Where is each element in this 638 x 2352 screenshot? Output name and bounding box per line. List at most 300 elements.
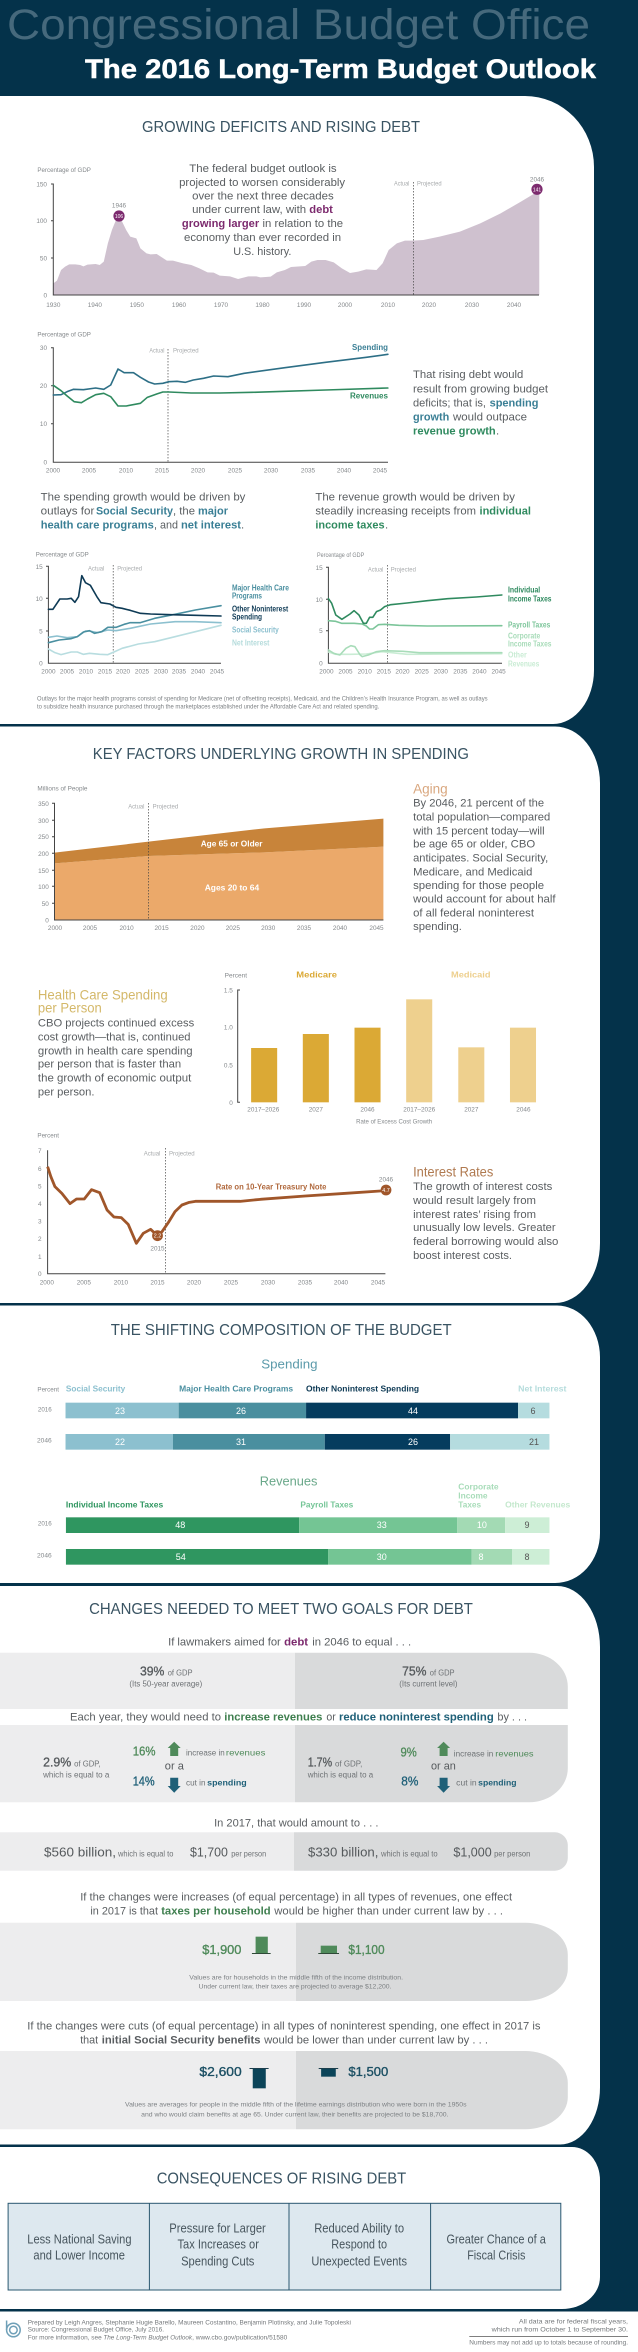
consequences table (8, 2203, 561, 2290)
chart: revenue composition: Revenues (260, 1473, 318, 1488)
chart: spending by category: 15 (36, 564, 43, 571)
chart: population by age: Millions of People (37, 786, 88, 793)
chart: spending by category: 2015 (98, 668, 113, 676)
text: interest rates: Interest Rates (413, 1164, 493, 1180)
comparison: social security benefits: and who would claim benefits at age 65. Under current law, their benefits are projected to be $18,700. (141, 2112, 449, 2119)
chart: revenues by category: 2040 (472, 668, 487, 676)
chart: revenue composition: 2016 (38, 1521, 52, 1528)
chart: spending composition: 26 (236, 1406, 246, 1416)
chart: debt as percentage of GDP: 0 (43, 292, 47, 300)
text: rising debt explanation: deficits; that is, (413, 397, 486, 409)
text: spending growth drivers: major (198, 506, 229, 518)
text: debt goal prompt: If lawmakers aimed for (168, 1637, 281, 1649)
notes: Numbers may not add up to totals because of rounding. (469, 2340, 628, 2347)
text: interest rates: unusually low levels. Greater (413, 1222, 556, 1234)
panel: changes needed to meet two goals for debt (0, 1586, 600, 2144)
chart: debt as percentage of GDP: 2040 (507, 302, 522, 309)
chart: spending composition: Major Health Care Programs (179, 1384, 293, 1394)
chart: spending by category: 2045 (210, 668, 225, 676)
chart: spending by category: 0 (39, 660, 43, 668)
chart: spending and revenues: 0 (43, 460, 47, 466)
heading: KEY FACTORS UNDERLYING GROWTH IN SPENDING (93, 746, 469, 763)
chart: spending composition: 23 (115, 1406, 125, 1416)
chart: revenues by category: 2045 (491, 668, 506, 676)
text: debt goal prompt (168, 1637, 411, 1649)
text: aging: Aging (413, 781, 448, 797)
chart: 10-year treasury rate: 7 (38, 1148, 42, 1155)
chart: spending and revenues: Projected (173, 348, 199, 355)
comparison: social security benefits: $2,600 (199, 2064, 242, 2079)
chart: revenues by category: Individual (508, 585, 540, 595)
chart: debt as percentage of GDP: 1980 (255, 302, 270, 309)
text: annual change prompt: or (326, 1712, 336, 1724)
chart: revenue composition: Taxes (458, 1499, 481, 1509)
chart: spending and revenues: 10 (40, 421, 47, 428)
chart: spending composition: 31 (236, 1437, 246, 1447)
comparison: taxes per household: $1,900 (202, 1942, 241, 1957)
chart: revenue composition: 30 (377, 1552, 387, 1562)
consequence: tax and spending pressure: Pressure for Larger (169, 2221, 266, 2236)
comparison: debt goals: (Its 50-year average) (129, 1680, 203, 1689)
left goal changes: revenues (226, 1749, 265, 1758)
chart: spending composition: 21 (529, 1437, 539, 1447)
chart: debt as percentage of GDP: 2046 (530, 176, 545, 184)
panel: growing deficits and rising debt (0, 96, 594, 724)
chart: excess cost growth bars: 0.5 (224, 1062, 233, 1070)
footnote: Outlays for the major health programs consist of spending for Medicare (net of offsetting receipts), Medicaid, and the Children’s Health Insurance Program, as well as outlays (37, 696, 488, 703)
text: budget outlook intro: U.S. history. (233, 246, 291, 258)
text: social security benefits prompt: that (80, 2035, 99, 2047)
text: health care spending per person: per Person (38, 1000, 102, 1016)
text: annual change prompt (70, 1712, 527, 1724)
chart: debt as percentage of GDP: 1946 (112, 202, 127, 210)
chart: excess cost growth bars: 2046 (516, 1107, 531, 1114)
text: health care spending per person (38, 986, 194, 1099)
text: annual change prompt: Each year, they would need to (70, 1712, 221, 1724)
text: aging: spending for those people (413, 880, 544, 892)
icon: tax bar 1100 (318, 1946, 339, 1954)
chart: debt as percentage of GDP: 141 (533, 187, 541, 193)
text: spending growth drivers: Social Security (96, 506, 174, 518)
chart: 10-year treasury rate: 2025 (224, 1279, 239, 1286)
chart: population by age: Actual (128, 804, 144, 811)
text: health care spending per person: growth in health care spending (38, 1046, 193, 1058)
chart: revenues by category: Corporate (508, 631, 540, 641)
text: 2017 prompt: In 2017, that would amount to . . . (214, 1818, 378, 1830)
chart: spending by category: Other Noninterest (232, 604, 288, 614)
chart: population by age: 150 (38, 868, 49, 875)
chart: population by age: 2020 (190, 925, 205, 932)
comparison: social security benefits: $1,500 (348, 2064, 388, 2079)
text: spending growth drivers: net interest (181, 520, 241, 532)
chart: population by age: 2005 (83, 925, 98, 932)
text: health care spending per person: Health Care Spending (38, 986, 168, 1002)
text: aging: with 15 percent today—will (412, 826, 545, 838)
chart: population by age: 50 (42, 901, 49, 908)
comparison: 2017 amounts: which is equal to (117, 1850, 174, 1859)
chart: debt as percentage of GDP: 1960 (172, 302, 187, 309)
chart: 10-year treasury rate: 2 (38, 1236, 42, 1243)
chart: revenue composition: 9 (524, 1520, 530, 1530)
heading: CHANGES NEEDED TO MEET TWO GOALS FOR DEBT (89, 1601, 473, 1618)
comparison: taxes per household (0, 1923, 568, 2001)
chart: 10-year treasury rate: 2.2 (154, 1234, 161, 1240)
right goal changes: 1.7% (308, 1756, 332, 1770)
comparison: 2017 amounts (0, 1832, 568, 1871)
chart: spending and revenues: 2005 (82, 468, 97, 474)
text: health care spending per person: the growth of economic output (38, 1073, 192, 1085)
notes: All data are for federal fiscal years, (519, 2318, 628, 2325)
text: rising debt explanation: . (496, 425, 499, 437)
chart: excess cost growth bars: 1.5 (224, 988, 233, 994)
chart: spending composition: Spending (261, 1356, 318, 1371)
text: interest rates (412, 1164, 558, 1262)
comparison: debt goals: of GDP (168, 1669, 192, 1678)
chart: population by age: Ages 20 to 64 (205, 883, 259, 893)
text: rising debt explanation: growth (413, 411, 449, 423)
left goal changes: 14% (133, 1775, 155, 1789)
title: The 2016 Long-Term Budget Outlook (85, 54, 597, 84)
chart: revenue composition (37, 1473, 570, 1565)
chart: excess cost growth bars: 2046 (360, 1107, 375, 1114)
text: spending growth drivers: outlays for (41, 506, 95, 518)
chart: spending composition: 2046 (37, 1437, 52, 1444)
credits (28, 2320, 351, 2342)
chart: population by age: 250 (38, 834, 49, 841)
chart: 10-year treasury rate: 2015 (150, 1246, 165, 1252)
text: rising debt explanation: spending (490, 397, 539, 409)
chart: revenue composition: 2046 (37, 1553, 52, 1560)
chart: population by age: 100 (38, 884, 49, 891)
consequence: saving and income (27, 2232, 131, 2263)
chart: spending composition: 22 (115, 1437, 125, 1447)
chart: debt as percentage of GDP (36, 167, 545, 309)
chart: debt as percentage of GDP: 1970 (214, 302, 229, 309)
consequence: tax and spending pressure: Spending Cuts (181, 2254, 255, 2269)
chart: revenues by category: 2020 (395, 668, 410, 676)
icon: benefit bar 1500 (319, 2068, 338, 2077)
chart: population by age: 2015 (154, 925, 169, 932)
chart: population by age: 200 (38, 851, 49, 858)
panel: key factors underlying growth in spending (0, 726, 600, 1303)
left goal changes: spending (207, 1779, 247, 1788)
chart: excess cost growth bars: 0 (229, 1100, 233, 1107)
heading: GROWING DEFICITS AND RISING DEBT (142, 119, 420, 136)
footnote (37, 696, 488, 711)
text: debt goal prompt: in 2046 to equal . . . (312, 1637, 411, 1649)
comparison: social security benefits: Values are averages for people in the middle fifth of the lifetime earnings distribution who were born in the 1950s (125, 2102, 466, 2109)
text: budget outlook intro: under current law, with (192, 204, 306, 216)
chart: spending by category: Percentage of GDP (36, 552, 89, 559)
right goal changes: or an (431, 1760, 456, 1772)
left goal changes: which is equal to a (42, 1770, 110, 1779)
chart: debt as percentage of GDP: 1930 (46, 302, 61, 309)
chart: spending and revenues: 2000 (46, 468, 61, 474)
chart: population by age: Projected (153, 804, 179, 811)
chart: revenues by category (316, 552, 552, 676)
chart: 10-year treasury rate: 4 (38, 1201, 42, 1208)
text: budget outlook intro: in relation to the (262, 218, 343, 230)
chart: population by age: 2040 (333, 925, 348, 932)
text: taxes per household prompt: taxes per household (161, 1906, 271, 1918)
chart: spending by category: 10 (36, 596, 43, 603)
chart: spending composition: 6 (530, 1406, 536, 1416)
text: health care spending per person: CBO projects continued excess (38, 1018, 194, 1030)
chart: population by age: 2010 (119, 925, 134, 932)
chart: 10-year treasury rate: 0 (38, 1271, 42, 1278)
chart: spending by category: Net Interest (232, 638, 270, 648)
chart: revenues by category: 0 (319, 660, 323, 668)
text: health care spending per person: per person that is faster than (38, 1059, 181, 1071)
comparison: taxes per household: Under current law, their taxes are projected to average $12,200. (199, 1984, 392, 1991)
chart: spending and revenues: 2030 (264, 468, 279, 474)
credits: For more information, see (28, 2335, 102, 2342)
chart: 10-year treasury rate: 2015 (150, 1279, 165, 1286)
chart: spending by category: 2030 (154, 668, 169, 676)
chart: population by age: Age 65 or Older (201, 839, 263, 849)
chart: revenue composition: Individual Income Taxes (66, 1499, 163, 1509)
chart: debt as percentage of GDP: 1950 (130, 302, 144, 309)
consequence: reduced ability to respond: Respond to (331, 2237, 387, 2252)
text: taxes per household prompt: in 2017 is that (90, 1906, 159, 1918)
chart: debt as percentage of GDP: 2030 (465, 302, 480, 309)
comparison: debt goals: 39% (140, 1665, 164, 1679)
comparison: 2017 amounts: per person (494, 1850, 530, 1859)
chart: revenue composition: 8 (478, 1552, 484, 1562)
chart: revenue composition: Income (458, 1490, 488, 1500)
text: budget outlook intro: over the next three decades (192, 190, 334, 202)
text: revenue growth drivers: individual (480, 506, 531, 518)
text: taxes per household prompt: If the changes were increases (of equal percentage) in all types of revenues, one effect (80, 1892, 513, 1904)
text: annual change prompt: reduce noninterest spending (339, 1712, 494, 1724)
text: rising debt explanation: result from growing budget (413, 383, 549, 395)
credits: , www.cbo.gov/publication/51580 (192, 2335, 288, 2342)
chart: spending composition: 26 (408, 1437, 418, 1447)
chart: revenues by category: Payroll Taxes (508, 620, 550, 630)
comparison: debt goals: (Its current level) (399, 1680, 458, 1689)
credits: Prepared by Leigh Angres, Stephanie Hugie Barello, Maureen Costantino, Benjamin Plotinsky, and Julie Topoleski (28, 2320, 351, 2327)
heading: CONSEQUENCES OF RISING DEBT (157, 2170, 406, 2187)
chart: excess cost growth bars: Percent (225, 972, 247, 979)
chart: revenues by category: 2000 (319, 668, 334, 676)
chart: debt as percentage of GDP: Percentage of GDP (37, 167, 91, 174)
chart: 10-year treasury rate: 1 (38, 1254, 42, 1261)
chart: 10-year treasury rate: 4.7 (382, 1188, 390, 1194)
comparison: debt goals: 75% (402, 1665, 426, 1679)
left goal changes: increase in (186, 1749, 225, 1758)
chart: population by age: 0 (45, 918, 49, 924)
chart: revenue composition: 48 (175, 1520, 185, 1530)
text: spending growth drivers: health care programs (41, 520, 154, 532)
chart: spending by category: 2020 (116, 668, 131, 676)
text: revenue growth drivers: The revenue growth would be driven by (315, 492, 515, 504)
chart: revenue composition: 10 (477, 1520, 487, 1530)
panel: the shifting composition of the budget (0, 1306, 600, 1583)
right goal changes: of GDP, (335, 1760, 362, 1769)
text: aging: Medicare, and Medicaid (413, 867, 532, 879)
comparison: 2017 amounts: per person (231, 1850, 266, 1859)
chart: revenue composition: 8 (524, 1552, 530, 1562)
consequence: fiscal crisis: Fiscal Crisis (467, 2248, 526, 2263)
chart: population by age: 2000 (48, 925, 63, 932)
chart: revenues by category: Income Taxes (508, 594, 552, 604)
text: aging: would account for about half (412, 894, 556, 906)
chart: 10-year treasury rate: Percent (37, 1133, 59, 1140)
chart: debt as percentage of GDP: 106 (115, 214, 123, 220)
right goal changes: 8% (401, 1775, 418, 1789)
chart: revenues by category: 2005 (338, 668, 353, 676)
comparison: taxes per household: Values are for households in the middle fifth of the income distribution. (189, 1974, 403, 1981)
chart: spending composition: Other Noninterest Spending (306, 1384, 419, 1394)
text: budget outlook intro: debt (309, 204, 333, 216)
chart: revenues by category: Percentage of GDP (317, 552, 364, 559)
text: budget outlook intro: economy than ever recorded in (184, 232, 341, 244)
left goal changes (42, 1742, 265, 1793)
chart: spending and revenues: 2040 (337, 468, 352, 474)
heading: THE SHIFTING COMPOSITION OF THE BUDGET (111, 1322, 452, 1339)
right goal changes: revenues (495, 1750, 534, 1759)
chart: spending and revenues: 20 (40, 383, 47, 390)
chart: spending composition: Percent (37, 1386, 59, 1393)
chart: revenues by category: Income Taxes (508, 639, 552, 649)
chart: revenues by category: Revenues (508, 659, 539, 669)
text: rising debt explanation: That rising debt would (413, 369, 523, 381)
chart: 10-year treasury rate: Actual (144, 1151, 160, 1158)
chart: 10-year treasury rate: 3 (38, 1218, 42, 1226)
chart: population by age: 350 (38, 801, 49, 808)
right goal changes: 9% (400, 1746, 417, 1760)
text: interest rates: federal borrowing would also (413, 1236, 558, 1248)
chart: spending by category: Spending (232, 611, 262, 621)
text: revenue growth drivers (315, 492, 531, 532)
text: budget outlook intro (179, 163, 345, 258)
chart: spending by category: 2000 (41, 668, 56, 676)
chart: spending and revenues: 2010 (119, 468, 134, 474)
consequence: reduced ability to respond: Unexpected Events (311, 2254, 407, 2269)
text: annual change prompt: increase revenues (224, 1712, 322, 1724)
chart: spending and revenues: Actual (149, 348, 164, 355)
chart: debt as percentage of GDP: 1940 (88, 302, 102, 309)
text: spending growth drivers: , the (173, 506, 195, 518)
chart: spending composition: 2016 (38, 1406, 52, 1413)
chart: revenues by category: Projected (391, 567, 416, 574)
header (7, 1, 597, 84)
consequence: saving and income: and Lower Income (33, 2248, 125, 2263)
text: health care spending per person: cost growth—that is, continued (38, 1032, 191, 1044)
chart: excess cost growth bars: 2027 (464, 1107, 479, 1114)
icon: tax bar 1900 (252, 1937, 271, 1954)
chart: spending and revenues: 2045 (373, 468, 388, 474)
right goal changes (307, 1742, 534, 1793)
chart: revenues by category: 2035 (453, 668, 468, 676)
text: health care spending per person: per person. (38, 1087, 94, 1099)
text: social security benefits prompt: would be lower than under current law by . . . (263, 2035, 488, 2047)
chart: 10-year treasury rate: Projected (169, 1151, 195, 1158)
text: spending growth drivers: The spending growth would be driven by (41, 492, 246, 504)
chart: spending by category: Major Health Care (232, 583, 289, 593)
chart: revenues by category: 10 (316, 597, 323, 604)
right goal changes: cut in (456, 1779, 477, 1788)
chart: 10-year treasury rate: 2035 (298, 1279, 313, 1286)
credits: Source: Congressional Budget Office, July 2016. (28, 2327, 164, 2334)
chart: spending by category: 5 (39, 628, 43, 636)
text: aging: By 2046, 21 percent of the (413, 798, 544, 810)
chart: spending and revenues: Percentage of GDP (37, 332, 91, 339)
chart: spending and revenues: Spending (352, 342, 388, 352)
text: spending growth drivers (41, 492, 246, 532)
chart: 10-year treasury rate: 2000 (40, 1279, 54, 1286)
chart: spending and revenues: 2020 (191, 468, 206, 474)
chart: revenue composition: Other Revenues (505, 1499, 570, 1509)
chart: spending composition (37, 1356, 567, 1450)
notes (469, 2318, 628, 2347)
chart: spending and revenues: 2035 (301, 468, 316, 474)
chart: revenues by category: 2010 (358, 668, 372, 676)
chart: population by age: 2035 (297, 925, 312, 932)
consequence: tax and spending pressure (169, 2221, 266, 2269)
chart: debt as percentage of GDP: 50 (40, 256, 47, 262)
chart: spending by category: 2040 (191, 668, 206, 676)
chart: spending by category: Actual (88, 566, 104, 573)
text: spending growth drivers: , and (154, 520, 178, 532)
consequence: reduced ability to respond: Reduced Ability to (314, 2221, 404, 2236)
text: aging: anticipates. Social Security, (413, 853, 548, 865)
comparison: 2017 amounts: $1,000 (453, 1846, 492, 1860)
comparison: social security benefits (0, 2051, 568, 2129)
text: spending growth drivers: . (241, 520, 244, 532)
chart: debt as percentage of GDP: Projected (417, 180, 442, 188)
comparison: 2017 amounts: $560 billion, (44, 1846, 116, 1860)
text: budget outlook intro: growing larger (182, 218, 260, 230)
chart: spending composition: Net Interest (518, 1384, 567, 1394)
chart: spending by category (36, 552, 289, 676)
text: rising debt explanation: revenue growth (413, 425, 496, 437)
chart: debt as percentage of GDP: 150 (36, 182, 47, 188)
left goal changes: cut in (186, 1779, 206, 1788)
chart: debt as percentage of GDP: 100 (36, 218, 47, 225)
credits: The Long-Term Budget Outlook (103, 2335, 193, 2342)
text: aging: be age 65 or older, CBO (413, 839, 535, 851)
chart: excess cost growth bars: 2027 (309, 1107, 323, 1114)
chart: revenues by category: 15 (316, 565, 323, 572)
text: taxes per household prompt (80, 1892, 513, 1918)
text: interest rates: boost interest costs. (413, 1250, 512, 1262)
text: rising debt explanation (413, 369, 549, 437)
chart: population by age (37, 786, 384, 932)
consequence: saving and income: Less National Saving (27, 2232, 131, 2247)
text: budget outlook intro: The federal budget outlook is (189, 163, 337, 175)
chart: population by age: 300 (38, 818, 49, 825)
chart: revenues by category: 2015 (377, 668, 391, 676)
chart: excess cost growth bars: 2017–2026 (403, 1107, 436, 1114)
comparison: 2017 amounts: which is equal to (380, 1850, 438, 1859)
chart: excess cost growth bars (224, 969, 536, 1126)
text: annual change prompt: by . . . (497, 1712, 527, 1724)
agency name: Congressional Budget Office (7, 1, 590, 49)
comparison: taxes per household: $1,100 (348, 1942, 385, 1957)
text: revenue growth drivers: income taxes (315, 520, 385, 532)
chart: spending by category: Social Security (232, 625, 279, 635)
chart: spending by category: 2010 (79, 668, 94, 676)
chart: excess cost growth bars: 2017–2026 (247, 1107, 280, 1114)
icon: CBO logo (7, 2320, 20, 2337)
footer (0, 2312, 638, 2352)
consequence: reduced ability to respond (311, 2221, 407, 2269)
chart: population by age: 2030 (261, 925, 276, 932)
text: interest rates: would result largely from (412, 1195, 536, 1207)
chart: spending and revenues: Revenues (350, 391, 388, 401)
chart: debt as percentage of GDP: Actual (394, 180, 409, 188)
